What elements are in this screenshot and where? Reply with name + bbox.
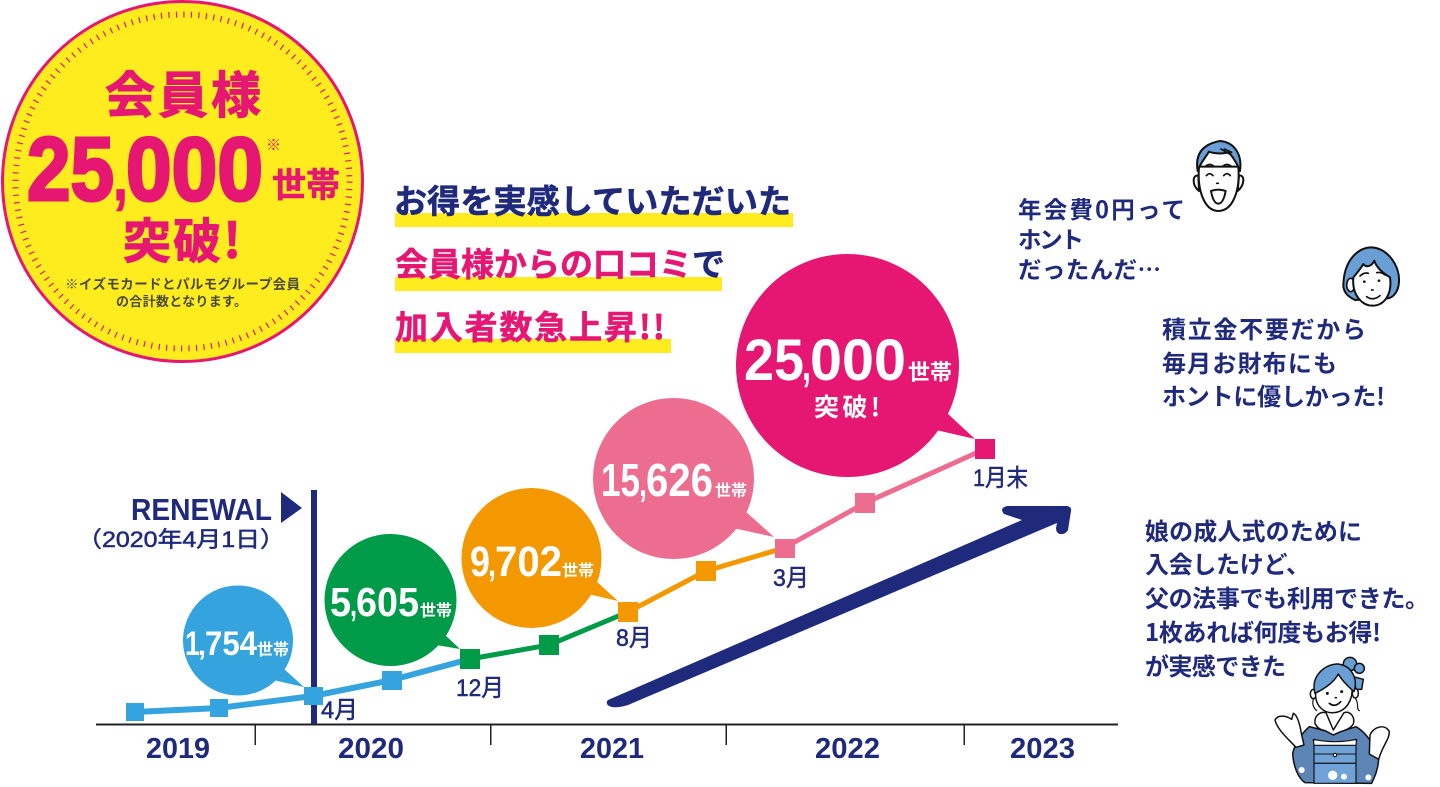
- month labels: 3月: [773, 565, 809, 592]
- bubble: 9,702: 世帯: [562, 557, 594, 581]
- badge: 25,000 households: ,: [113, 137, 128, 215]
- month labels: 8月: [616, 625, 652, 652]
- bubble: 25,000: 突破!: [814, 388, 880, 424]
- bubble: 15,626: ,: [639, 463, 647, 505]
- heading: word of mouth message: お得を実感していただいた: [394, 175, 791, 223]
- comment: coming of age: 入会したけど、: [1145, 545, 1310, 580]
- bubble: 15,626: 15: [601, 454, 640, 506]
- bubble: 9,702: 9: [470, 538, 490, 586]
- bubble: 25,000: ,: [802, 338, 811, 390]
- month labels: [321, 465, 1028, 724]
- bubble: 9,702: 702: [495, 538, 562, 586]
- comment: coming of age: [1145, 512, 1429, 682]
- badge: 25,000 households: 会員様: [105, 56, 261, 128]
- badge: 25,000 households: 25: [27, 120, 114, 220]
- heading: word of mouth message: 加入者数急上昇!!: [395, 301, 665, 349]
- bubble: 25,000: 世帯: [908, 355, 952, 387]
- bubble: 1,754: 世帯: [257, 636, 289, 660]
- timeline axis: 2021: [580, 733, 644, 765]
- bubble: 15,626: [593, 398, 774, 559]
- big growth arrow: [607, 506, 1071, 707]
- bubble: 1,754: 754: [205, 625, 257, 663]
- renewal marker: RENEWAL: [131, 492, 272, 527]
- icon: woman in kimono: [1275, 657, 1389, 783]
- badge: 25,000 households: ※: [266, 134, 281, 155]
- bubble: 1,754: 1: [185, 625, 200, 663]
- timeline axis: 2019: [146, 733, 210, 765]
- bubble: 25,000: [736, 254, 975, 477]
- badge: 25,000 households: 世帯: [272, 158, 340, 207]
- heading: word of mouth message: [394, 175, 793, 353]
- timeline axis: 2020: [338, 733, 404, 765]
- bubble: 1,754: [183, 586, 304, 696]
- comment: no deposit: ホントに優しかった!: [1162, 377, 1385, 412]
- comment: annual fee: 年会費0円って: [1018, 191, 1185, 225]
- bubble: 15,626: 626: [646, 454, 713, 506]
- comment: annual fee: ホント: [1018, 221, 1084, 255]
- bubble: 1,754: ,: [198, 629, 206, 662]
- bubble: 5,605: ,: [350, 586, 357, 624]
- timeline axis: 2022: [815, 733, 880, 765]
- bubble: 5,605: 605: [356, 579, 419, 625]
- comment: annual fee: [1018, 191, 1185, 285]
- icon: smiling man: [1194, 141, 1243, 211]
- heading: word of mouth message: 会員様からの口コミで: [395, 238, 725, 286]
- timeline axis: 2023: [1010, 733, 1075, 765]
- bubble: 25,000: 25: [744, 328, 804, 393]
- badge: 25,000 households: ※イズモカードとパルモグループ会員: [65, 273, 300, 293]
- comment: coming of age: 父の法事でも利用できた。: [1145, 579, 1429, 614]
- bubble: 15,626: 世帯: [715, 477, 747, 501]
- badge: 25,000 households: の合計数となります。: [116, 291, 247, 310]
- renewal marker: （2020年4月1日）: [77, 527, 285, 552]
- bubble: 9,702: [462, 488, 618, 628]
- bubble: 5,605: 世帯: [420, 597, 452, 621]
- month labels: 4月: [321, 697, 358, 724]
- renewal marker: [77, 490, 317, 724]
- month labels: 12月: [456, 675, 504, 702]
- bubble: 25,000: 000: [810, 328, 906, 393]
- line chart: member growth: [126, 439, 995, 721]
- timeline axis: [96, 724, 1118, 765]
- bubble: 5,605: 5: [330, 579, 351, 625]
- badge: 25,000 households: 000: [126, 120, 263, 220]
- comment: no deposit: 毎月お財布にも: [1162, 344, 1337, 379]
- bubble: 5,605: [324, 534, 460, 666]
- comment: coming of age: 娘の成人式のために: [1145, 512, 1362, 547]
- badge: 25,000 households: [2, 2, 362, 362]
- badge: 25,000 households: 突破!: [123, 202, 241, 272]
- comment: no deposit: [1162, 310, 1385, 412]
- comment: annual fee: だったんだ…: [1018, 251, 1161, 285]
- comment: coming of age: が実感できた: [1145, 647, 1286, 682]
- bubble: 9,702: ,: [488, 543, 496, 584]
- comment: coming of age: 1枚あれば何度もお得!: [1145, 613, 1381, 648]
- comment: no deposit: 積立金不要だから: [1162, 310, 1366, 345]
- month labels: 1月末: [973, 465, 1028, 492]
- icon: smiling woman: [1343, 247, 1399, 306]
